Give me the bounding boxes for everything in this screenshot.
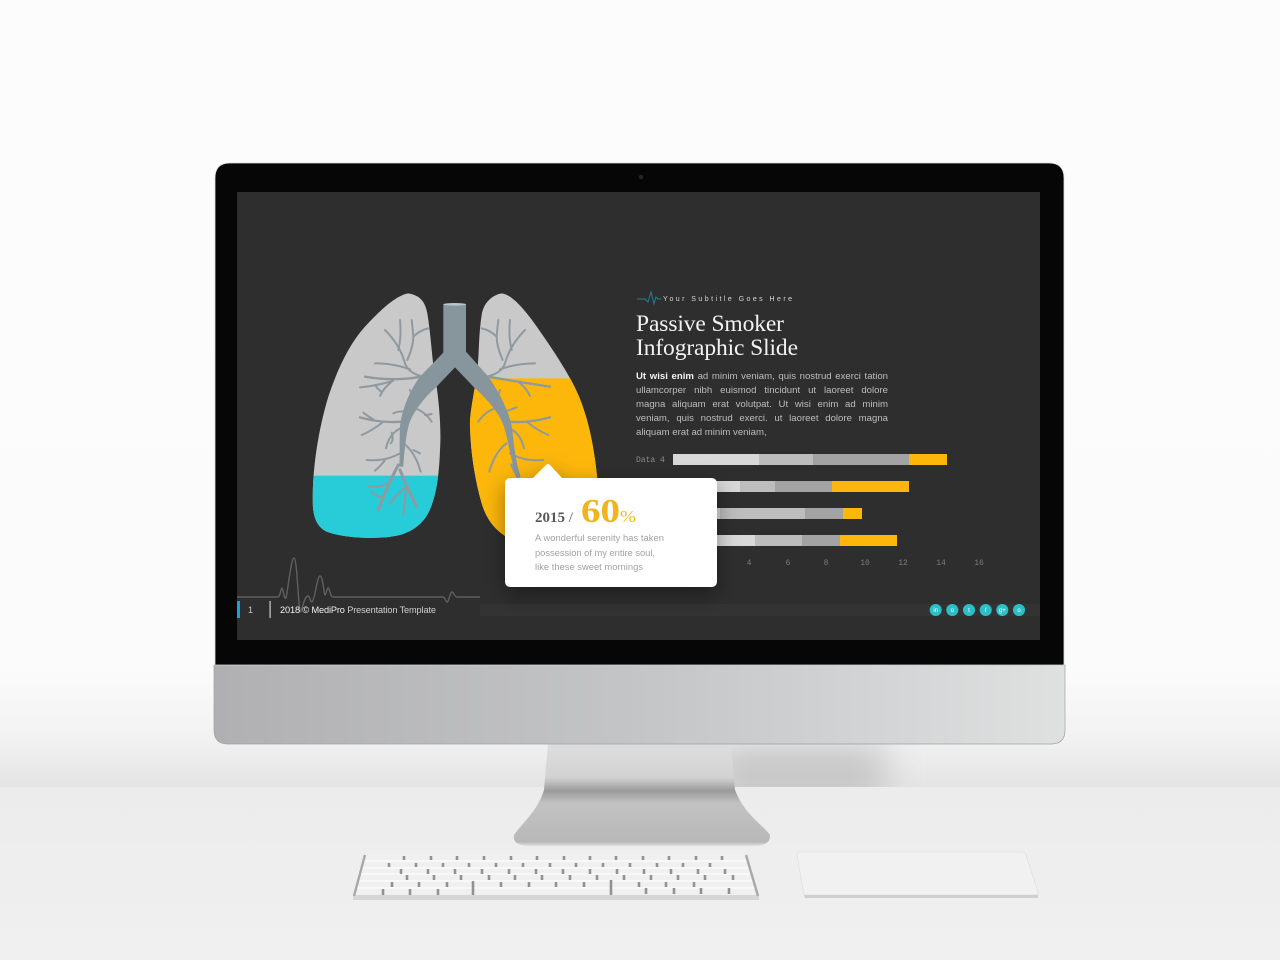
- card percent sign: %: [620, 507, 636, 526]
- body text: aliquam erat ad minim veniam,: [636, 427, 767, 438]
- lungs illustration: [300, 280, 610, 549]
- keyboard: [353, 855, 759, 900]
- left lung: [312, 294, 440, 538]
- right airway branches: [478, 320, 550, 510]
- background: desk: [0, 787, 1280, 960]
- card year: 2015 /: [535, 510, 574, 526]
- bar: data 1: [673, 535, 897, 546]
- axis labels: 8: [824, 559, 829, 568]
- card percentage: 60: [581, 493, 620, 530]
- body text: Ut wisi enim ad minim veniam, quis nostrud exerci tation: [636, 371, 888, 382]
- trachea opening: [443, 303, 466, 306]
- axis labels: 4: [747, 559, 752, 568]
- monitor stand: [514, 744, 770, 846]
- subtitle: Your Subtitle Goes Here: [663, 296, 792, 303]
- bar chart label: Data 4: [636, 456, 665, 465]
- slide screen: [237, 192, 1040, 640]
- body text: magna aliquam erat volutpat. Ut wisi enim ad minim: [636, 399, 888, 410]
- page number: 1: [248, 605, 253, 615]
- keyboard key gaps: [383, 856, 733, 895]
- body text: ullamcorper nibh euismod tincidunt ut laoreet dolore: [636, 385, 888, 396]
- keyboard row highlights: [355, 861, 757, 888]
- footer heartbeat line: [237, 558, 480, 612]
- keyboard base: [353, 855, 759, 900]
- trackpad: [797, 852, 1038, 898]
- bar: data 2: [673, 508, 862, 519]
- axis labels: 12: [898, 559, 908, 568]
- footer accent bar: [237, 601, 240, 618]
- card description: like these sweet mornings: [535, 561, 643, 572]
- body text: [636, 371, 888, 438]
- social icons: f: [985, 608, 987, 614]
- social icons: in: [933, 608, 938, 614]
- callout card: [505, 464, 717, 587]
- bar: data 4: [673, 454, 947, 465]
- trackpad surface: [797, 852, 1038, 895]
- body text: veniam, quis nostrud exerci. ut laoreet dolore magna: [636, 413, 888, 424]
- axis labels: 16: [974, 559, 984, 568]
- footer strip: [480, 604, 1040, 616]
- monitor chin: [214, 665, 1065, 744]
- trackpad front edge: [804, 895, 1038, 898]
- card description: possession of my entire soul,: [535, 547, 655, 558]
- social icons: [930, 604, 1025, 616]
- footer separator: [270, 601, 271, 618]
- subtitle pulse icon: [637, 292, 661, 304]
- axis labels: 10: [860, 559, 870, 568]
- monitor bezel: [215, 163, 1064, 665]
- card description: A wonderful serenity has taken: [535, 532, 664, 543]
- axis labels: 6: [786, 559, 791, 568]
- left airway branches: [360, 320, 432, 515]
- monitor: [214, 163, 1065, 744]
- trachea and main bronchi: [399, 304, 521, 477]
- right lung: [470, 294, 598, 536]
- social icons: g+: [999, 608, 1006, 614]
- webcam: [639, 175, 643, 179]
- keyboard side edges: [354, 855, 758, 896]
- title: [636, 311, 798, 361]
- social icons: o: [1017, 608, 1021, 614]
- keyboard front edge: [353, 895, 759, 900]
- axis labels: 14: [936, 559, 946, 568]
- social icons: o: [951, 608, 955, 614]
- footer: [237, 601, 436, 618]
- title: Infographic Slide: [636, 335, 798, 361]
- bar chart: [636, 454, 984, 568]
- social icons: t: [968, 608, 970, 614]
- axis labels: [747, 559, 984, 568]
- footer copyright: 2018 © MediPro Presentation Template: [280, 605, 436, 615]
- card description: [535, 532, 664, 572]
- stand shadow on wall: [731, 744, 898, 787]
- card body with pointer: [505, 464, 717, 587]
- bar: data 3: [673, 481, 909, 492]
- title: Passive Smoker: [636, 311, 784, 337]
